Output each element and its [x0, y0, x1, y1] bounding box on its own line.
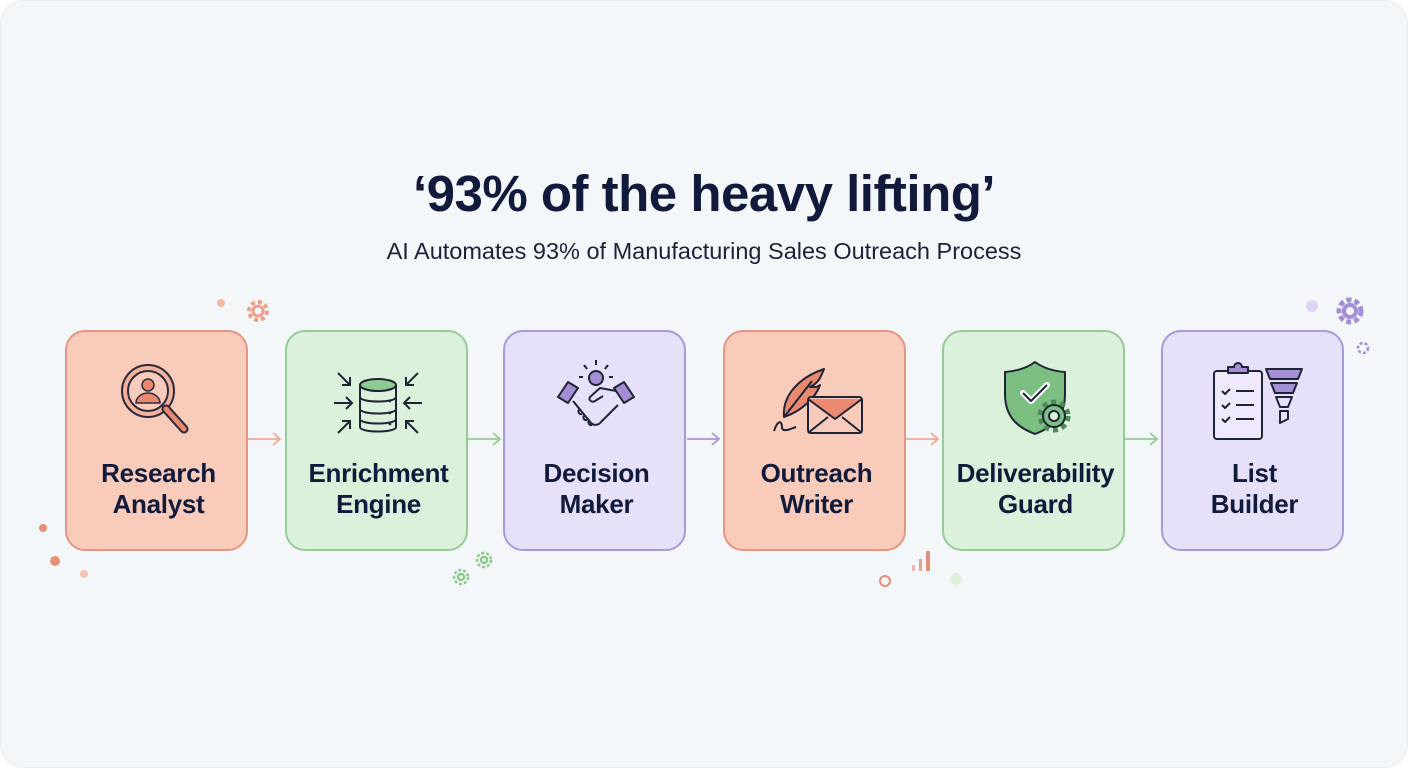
- arrow: [248, 432, 282, 446]
- card: List Builder: List: [1232, 458, 1277, 488]
- icon: magnifier person: [121, 364, 188, 434]
- arrow: [1125, 432, 1158, 446]
- card: Outreach Writer: [723, 330, 906, 551]
- card: List Builder: Builder: [1211, 489, 1298, 519]
- card: Enrichment Engine: [285, 330, 468, 551]
- card: Enrichment Engine: Enrichment: [308, 458, 449, 488]
- card: Research Analyst: Research: [101, 458, 216, 488]
- card: Decision Maker: [503, 330, 686, 551]
- card: Enrichment Engine: Engine: [336, 489, 421, 519]
- card: Deliverability Guard: [942, 330, 1125, 551]
- icon: shield with gear: [1004, 361, 1070, 435]
- arrow: [906, 432, 940, 446]
- card: List Builder: [1161, 330, 1344, 551]
- card: Outreach Writer: Outreach: [761, 458, 872, 488]
- card: Deliverability Guard: Deliverability: [957, 458, 1114, 488]
- card: Decision Maker: Decision: [544, 458, 649, 488]
- card: Research Analyst: [65, 330, 248, 551]
- icon: clipboard and funnel: [1213, 362, 1303, 440]
- card: Research Analyst: Analyst: [113, 489, 204, 519]
- subtitle: AI Automates 93% of Manufacturing Sales Outreach Process: [387, 238, 1021, 264]
- icon: database arrows: [334, 372, 422, 434]
- card: Decision Maker: Maker: [560, 489, 633, 519]
- card: Outreach Writer: Writer: [780, 489, 853, 519]
- arrow: [468, 432, 502, 446]
- card: Deliverability Guard: Guard: [998, 489, 1073, 519]
- icon: quill and envelope: [773, 368, 863, 434]
- arrow: [687, 432, 720, 446]
- title: ‘93% of the heavy lifting’: [413, 165, 995, 222]
- icon: handshake: [557, 360, 635, 426]
